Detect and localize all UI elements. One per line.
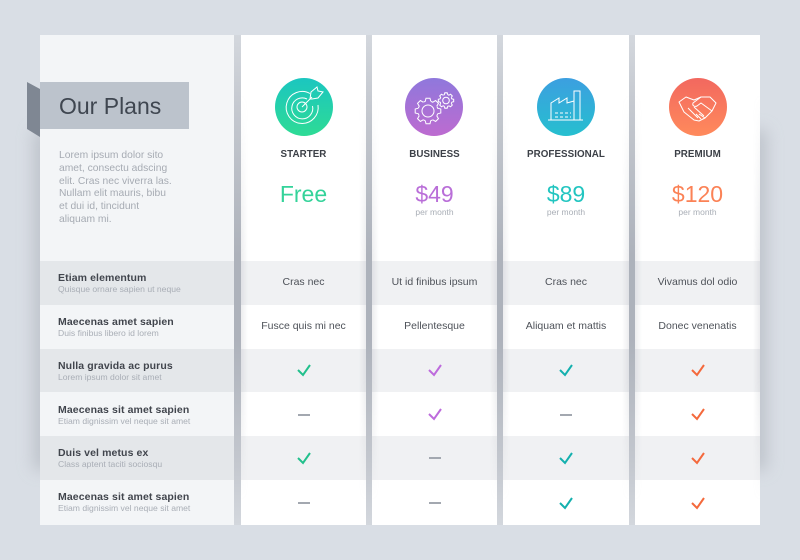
check bbox=[428, 408, 442, 420]
row band: Nulla gravida bbox=[40, 349, 234, 392]
soft outer shadow behind the table bbox=[33, 130, 767, 470]
text: Cras nec: Cras nec bbox=[545, 276, 587, 288]
description text: amet, consectu adscing bbox=[59, 163, 167, 174]
feature: Maecenas sit amet sapien: Maecenas sit amet sapien bbox=[58, 404, 189, 416]
check bbox=[297, 364, 311, 376]
dash bbox=[298, 502, 310, 504]
feature: Nulla gravida ac purus bbox=[58, 360, 173, 382]
feature: Maecenas amet sapien: Duis finibus libero id lorem bbox=[58, 328, 159, 338]
row band: Duis vel metus bbox=[40, 436, 234, 480]
text: Donec venenatis: Donec venenatis bbox=[658, 320, 737, 332]
description text: aliquam mi. bbox=[59, 214, 112, 225]
per month: per month bbox=[415, 207, 454, 217]
check bbox=[428, 364, 442, 376]
title: Our Plans bbox=[59, 93, 161, 119]
row band: Etiam elementum bbox=[40, 261, 234, 305]
dash bbox=[429, 457, 441, 459]
icon: factory bbox=[537, 78, 595, 136]
icon: gears bbox=[405, 78, 463, 136]
text: Aliquam et mattis: Aliquam et mattis bbox=[526, 320, 606, 332]
check bbox=[691, 364, 705, 376]
description text: et dui id, tincidunt bbox=[59, 201, 139, 212]
feature: Nulla gravida ac purus: Lorem ipsum dolor sit amet bbox=[58, 372, 162, 382]
feature: Nulla gravida ac purus: Nulla gravida ac purus bbox=[58, 360, 173, 372]
shadow gutters between columns bbox=[234, 35, 241, 525]
price: $120 bbox=[672, 181, 723, 207]
check bbox=[559, 364, 573, 376]
heading ribbon: Our Plans bbox=[27, 82, 189, 137]
feature: Maecenas sit amet sapien bbox=[58, 404, 190, 426]
dash bbox=[298, 414, 310, 416]
description text bbox=[59, 150, 172, 225]
ribbon bar bbox=[40, 82, 189, 129]
check bbox=[691, 452, 705, 464]
plan name: STARTER bbox=[281, 149, 326, 160]
description text: Lorem ipsum dolor sito bbox=[59, 150, 163, 161]
price: Free bbox=[280, 181, 327, 207]
price: $89 bbox=[547, 181, 585, 207]
panel: starter plan bbox=[241, 35, 366, 525]
panel: our plans sidebar bbox=[40, 35, 234, 525]
text: Ut id finibus ipsum: Ut id finibus ipsum bbox=[392, 276, 477, 288]
feature: Maecenas amet sapien bbox=[58, 316, 174, 338]
feature: Etiam elementum: Etiam elementum bbox=[58, 272, 146, 284]
check bbox=[691, 408, 705, 420]
price: $49 bbox=[415, 181, 454, 207]
plan name: PROFESSIONAL bbox=[527, 149, 605, 160]
panel: business plan bbox=[372, 35, 497, 525]
plan name: PREMIUM bbox=[674, 149, 721, 160]
feature: Maecenas sit amet sapien 2 bbox=[58, 491, 190, 513]
check bbox=[297, 452, 311, 464]
feature: Maecenas sit amet sapien: Etiam dignissim vel neque sit amet bbox=[58, 416, 190, 426]
per month: per month bbox=[547, 207, 585, 217]
text: Vivamus dol odio: Vivamus dol odio bbox=[658, 276, 737, 288]
check bbox=[691, 497, 705, 510]
text: Fusce quis mi nec: Fusce quis mi nec bbox=[261, 320, 346, 332]
feature: Etiam elementum bbox=[58, 272, 181, 294]
dash bbox=[429, 502, 441, 504]
feature: Maecenas amet sapien: Maecenas amet sapien bbox=[58, 316, 174, 328]
feature: Duis vel metus ex bbox=[58, 447, 162, 469]
description text: elit. Cras nec viverra las. bbox=[59, 176, 172, 187]
feature: Duis vel metus ex: Duis vel metus ex bbox=[58, 447, 148, 459]
panel: premium plan bbox=[635, 35, 760, 525]
text: Pellentesque: Pellentesque bbox=[404, 320, 465, 332]
feature: Maecenas sit amet sapien 2: Maecenas sit amet sapien bbox=[58, 491, 189, 503]
text: Cras nec: Cras nec bbox=[282, 276, 324, 288]
dash bbox=[560, 414, 572, 416]
check bbox=[559, 497, 573, 510]
check bbox=[559, 452, 573, 464]
feature: Duis vel metus ex: Class aptent taciti sociosqu bbox=[58, 459, 162, 469]
per month: per month bbox=[678, 207, 717, 217]
feature: Maecenas sit amet sapien 2: Etiam dignissim vel neque sit amet bbox=[58, 503, 190, 513]
feature: Etiam elementum: Quisque ornare sapien ut neque bbox=[58, 284, 181, 294]
icon: target bbox=[275, 78, 333, 136]
panel: professional plan bbox=[503, 35, 629, 525]
ribbon fold bbox=[27, 82, 40, 137]
description text: Nullam elit mauris, bibu bbox=[59, 188, 166, 199]
plan name: BUSINESS bbox=[409, 149, 460, 160]
icon: handshake bbox=[669, 78, 727, 136]
